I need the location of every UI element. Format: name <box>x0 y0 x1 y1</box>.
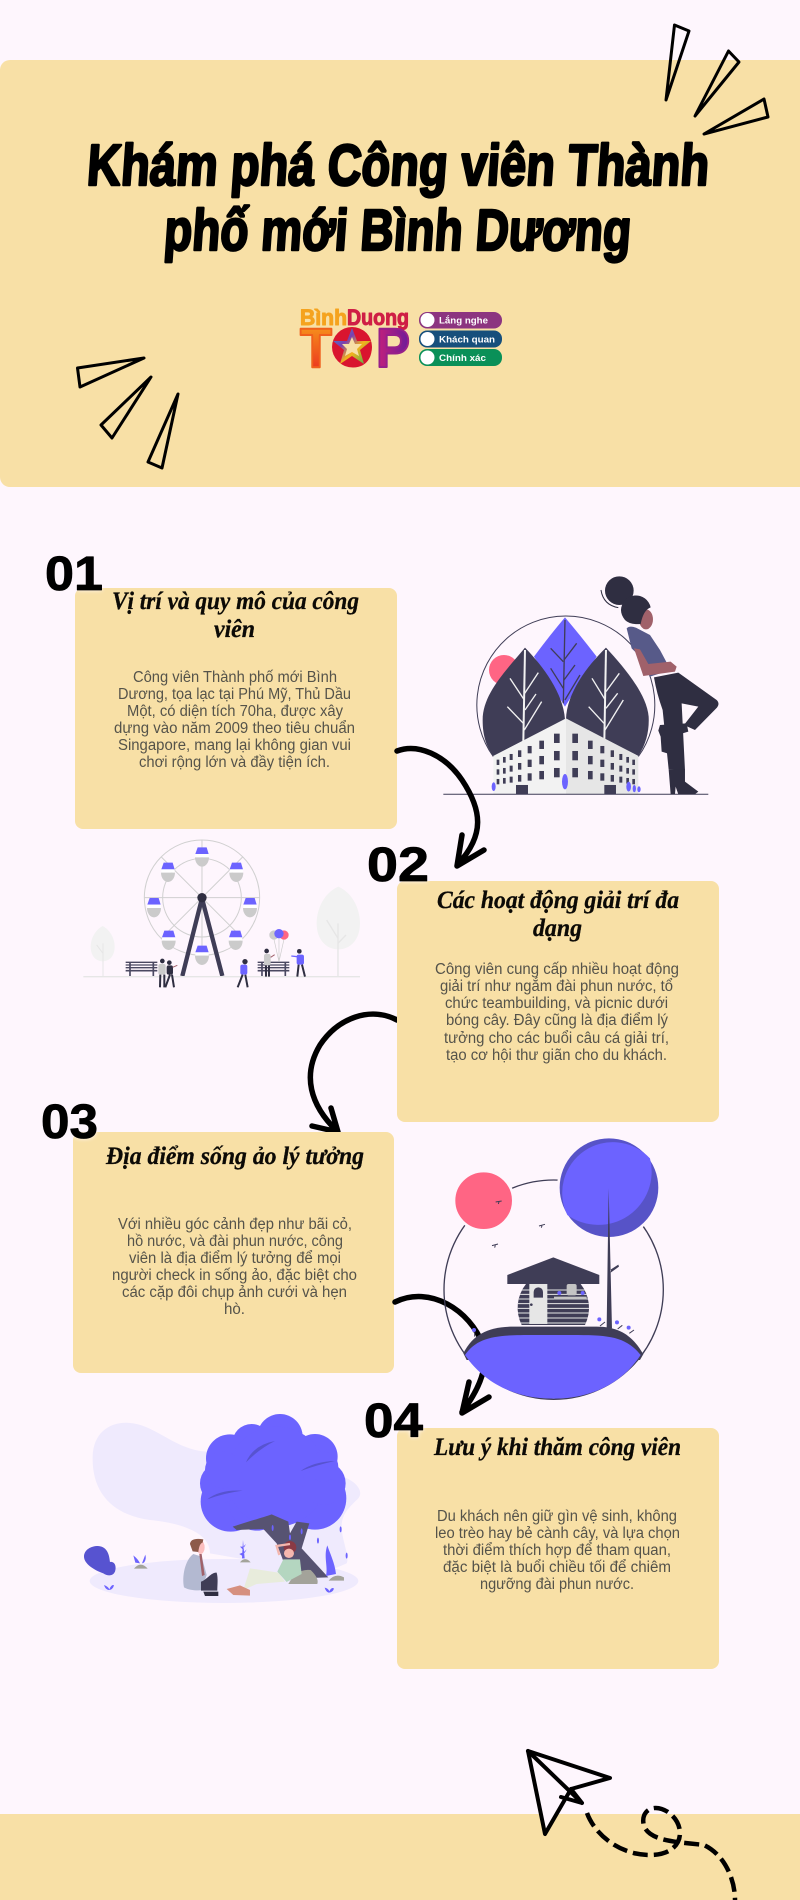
body text 04: Du khách nên giữ gìn vệ sinh, không <box>437 1508 677 1525</box>
panel: 03 photo spot <box>73 1132 394 1373</box>
white branches <box>507 650 623 742</box>
body text 02: giải trí như ngắm đài phun nước, tổ <box>440 978 673 995</box>
heading 04: Lưu ý khi thăm công viên <box>433 1434 681 1461</box>
body text 01: dựng vào năm 2009 theo tiêu chuẩn <box>114 720 355 737</box>
illustration: ferris wheel park <box>83 840 360 987</box>
arrow: 02 to 03 <box>310 1014 397 1132</box>
arrow: 03 to 04 <box>395 1297 489 1413</box>
rocks <box>134 1559 344 1584</box>
burst: top right <box>666 25 768 134</box>
burst: bottom left <box>78 358 178 468</box>
body text 01: Một, có diện tích 70ha, được xây <box>127 703 343 720</box>
panel: 01 location <box>75 588 397 829</box>
body text 03: hò. <box>224 1301 245 1318</box>
body text 03: Với nhiều góc cảnh đẹp như bãi cỏ, <box>118 1216 352 1233</box>
body text 04: ngưỡng đài phun nước. <box>480 1576 634 1593</box>
crown shading <box>207 1441 335 1499</box>
middle tree branches <box>551 620 580 703</box>
people <box>158 949 305 987</box>
sun <box>489 655 519 685</box>
logo wordmark: Duong <box>347 305 409 330</box>
logo pill: Lắng nghe <box>419 312 502 328</box>
right leaf <box>566 648 649 756</box>
number 03: 03 <box>41 1096 98 1149</box>
body text 03: các cặp đôi chụp ảnh cưới và hẹn <box>122 1284 347 1301</box>
flame plant <box>326 1545 336 1576</box>
panel: header band <box>0 60 800 487</box>
body text 02: tưởng cho các buổi câu cá giải trí, <box>444 1030 669 1047</box>
body text 04: đặc biệt là buổi chiều tối để chiêm <box>443 1559 671 1576</box>
purple tree crown <box>558 1137 660 1238</box>
wheel frame <box>144 840 260 955</box>
purple leaf <box>534 617 597 707</box>
body text 01: Công viên Thành phố mới Bình <box>133 669 337 686</box>
illustration: picnic under tree <box>84 1414 360 1603</box>
seated man <box>183 1539 218 1596</box>
cabins <box>147 847 257 965</box>
small blue trees <box>492 774 641 792</box>
dome ring <box>477 616 655 757</box>
body text 02: chức teambuilding, và picnic dưới <box>445 995 668 1012</box>
heading 03: Địa điểm sống ảo lý tưởng <box>105 1143 364 1170</box>
ground line <box>443 793 708 796</box>
ground ellipse <box>90 1559 358 1603</box>
body text 02 <box>435 961 679 1064</box>
panel: 04 notes <box>397 1428 719 1669</box>
panel: footer band <box>0 1814 800 1900</box>
number 01: 01 <box>45 548 103 601</box>
logo pill: Khách quan: Khách quan <box>439 334 495 346</box>
tree crown <box>200 1414 346 1532</box>
logo wordmark: O <box>332 316 374 379</box>
island ground <box>463 1327 643 1360</box>
logo pill: Chính xác: Chính xác <box>439 353 487 364</box>
left bush <box>84 1546 116 1575</box>
body text 03: viên là địa điểm lý tưởng để mọi <box>129 1250 341 1267</box>
bench right <box>258 962 289 976</box>
building <box>493 718 638 794</box>
body text 04: thời điểm thích hợp để tham quan, <box>443 1542 671 1559</box>
logo: Binh Duong TOP <box>300 305 502 379</box>
number 02: 02 <box>367 839 429 892</box>
heading 02 <box>437 887 679 942</box>
title <box>85 133 712 263</box>
number 04: 04 <box>364 1395 423 1448</box>
body text 01: Singapore, mang lại không gian vui <box>118 737 351 754</box>
sprigs <box>104 1540 334 1593</box>
woman <box>601 576 718 794</box>
lavender blob <box>93 1423 360 1573</box>
balloons <box>269 929 289 962</box>
right tree <box>317 887 360 976</box>
body text 04 <box>435 1508 680 1593</box>
heading 02: Các hoạt động giải trí đa <box>437 887 679 914</box>
panel: 02 activities <box>397 881 719 1122</box>
heading 01 <box>112 588 359 643</box>
reclining woman <box>227 1541 302 1596</box>
birds <box>492 1201 545 1248</box>
body text 02: Công viên cung cấp nhiều hoạt động <box>435 961 679 978</box>
icon: paper plane <box>528 1751 610 1834</box>
falling leaves <box>272 1525 348 1559</box>
heading 01: viên <box>214 616 255 643</box>
body text 03 <box>112 1216 357 1318</box>
logo wordmark: T <box>300 316 332 379</box>
water <box>465 1335 641 1399</box>
ring <box>444 1180 663 1399</box>
ground <box>83 975 360 979</box>
arrow: 01 to 02 <box>397 749 484 866</box>
body text 04: leo trèo hay bẻ cành cây, và lựa chọn <box>435 1525 680 1542</box>
logo wordmark <box>300 305 410 379</box>
logo pill: Khách quan <box>419 330 502 348</box>
tree trunk <box>607 1188 619 1328</box>
illustration: woman leaning on building dome <box>443 576 718 794</box>
pink sun <box>454 1171 513 1230</box>
heading 02: dạng <box>533 915 582 942</box>
left leaf <box>483 648 565 756</box>
wheel legs <box>182 893 222 976</box>
heading 01: Vị trí và quy mô của công <box>112 588 359 615</box>
body text 01 <box>114 669 355 771</box>
left tree <box>91 926 115 976</box>
logo wordmark: Bình <box>300 305 347 330</box>
body text 01: chơi rộng lớn và đầy tiện ích. <box>139 754 330 771</box>
logo wordmark: P <box>376 316 410 379</box>
title: phố mới Bình Dương <box>162 198 634 263</box>
logo pill: Chính xác <box>419 349 502 366</box>
illustration: house on island <box>444 1137 663 1399</box>
bench left <box>126 962 157 976</box>
body text 01: Dương, tọa lạc tại Phú Mỹ, Thủ Dầu <box>118 686 351 703</box>
logo pill: Lắng nghe: Lắng nghe <box>439 314 488 326</box>
dashed flight path <box>587 1808 735 1900</box>
body text 03: hồ nước, và đài phun nước, công <box>127 1233 343 1250</box>
body text 02: bóng cây. Đây cũng là địa điểm lý <box>446 1012 668 1029</box>
body text 03: người check in sống ảo, đặc biệt cho <box>112 1267 357 1284</box>
body text 02: tạo cơ hội thư giãn cho du khách. <box>446 1047 667 1064</box>
flowers <box>472 1317 634 1337</box>
trunk <box>233 1514 328 1579</box>
house <box>507 1257 599 1325</box>
